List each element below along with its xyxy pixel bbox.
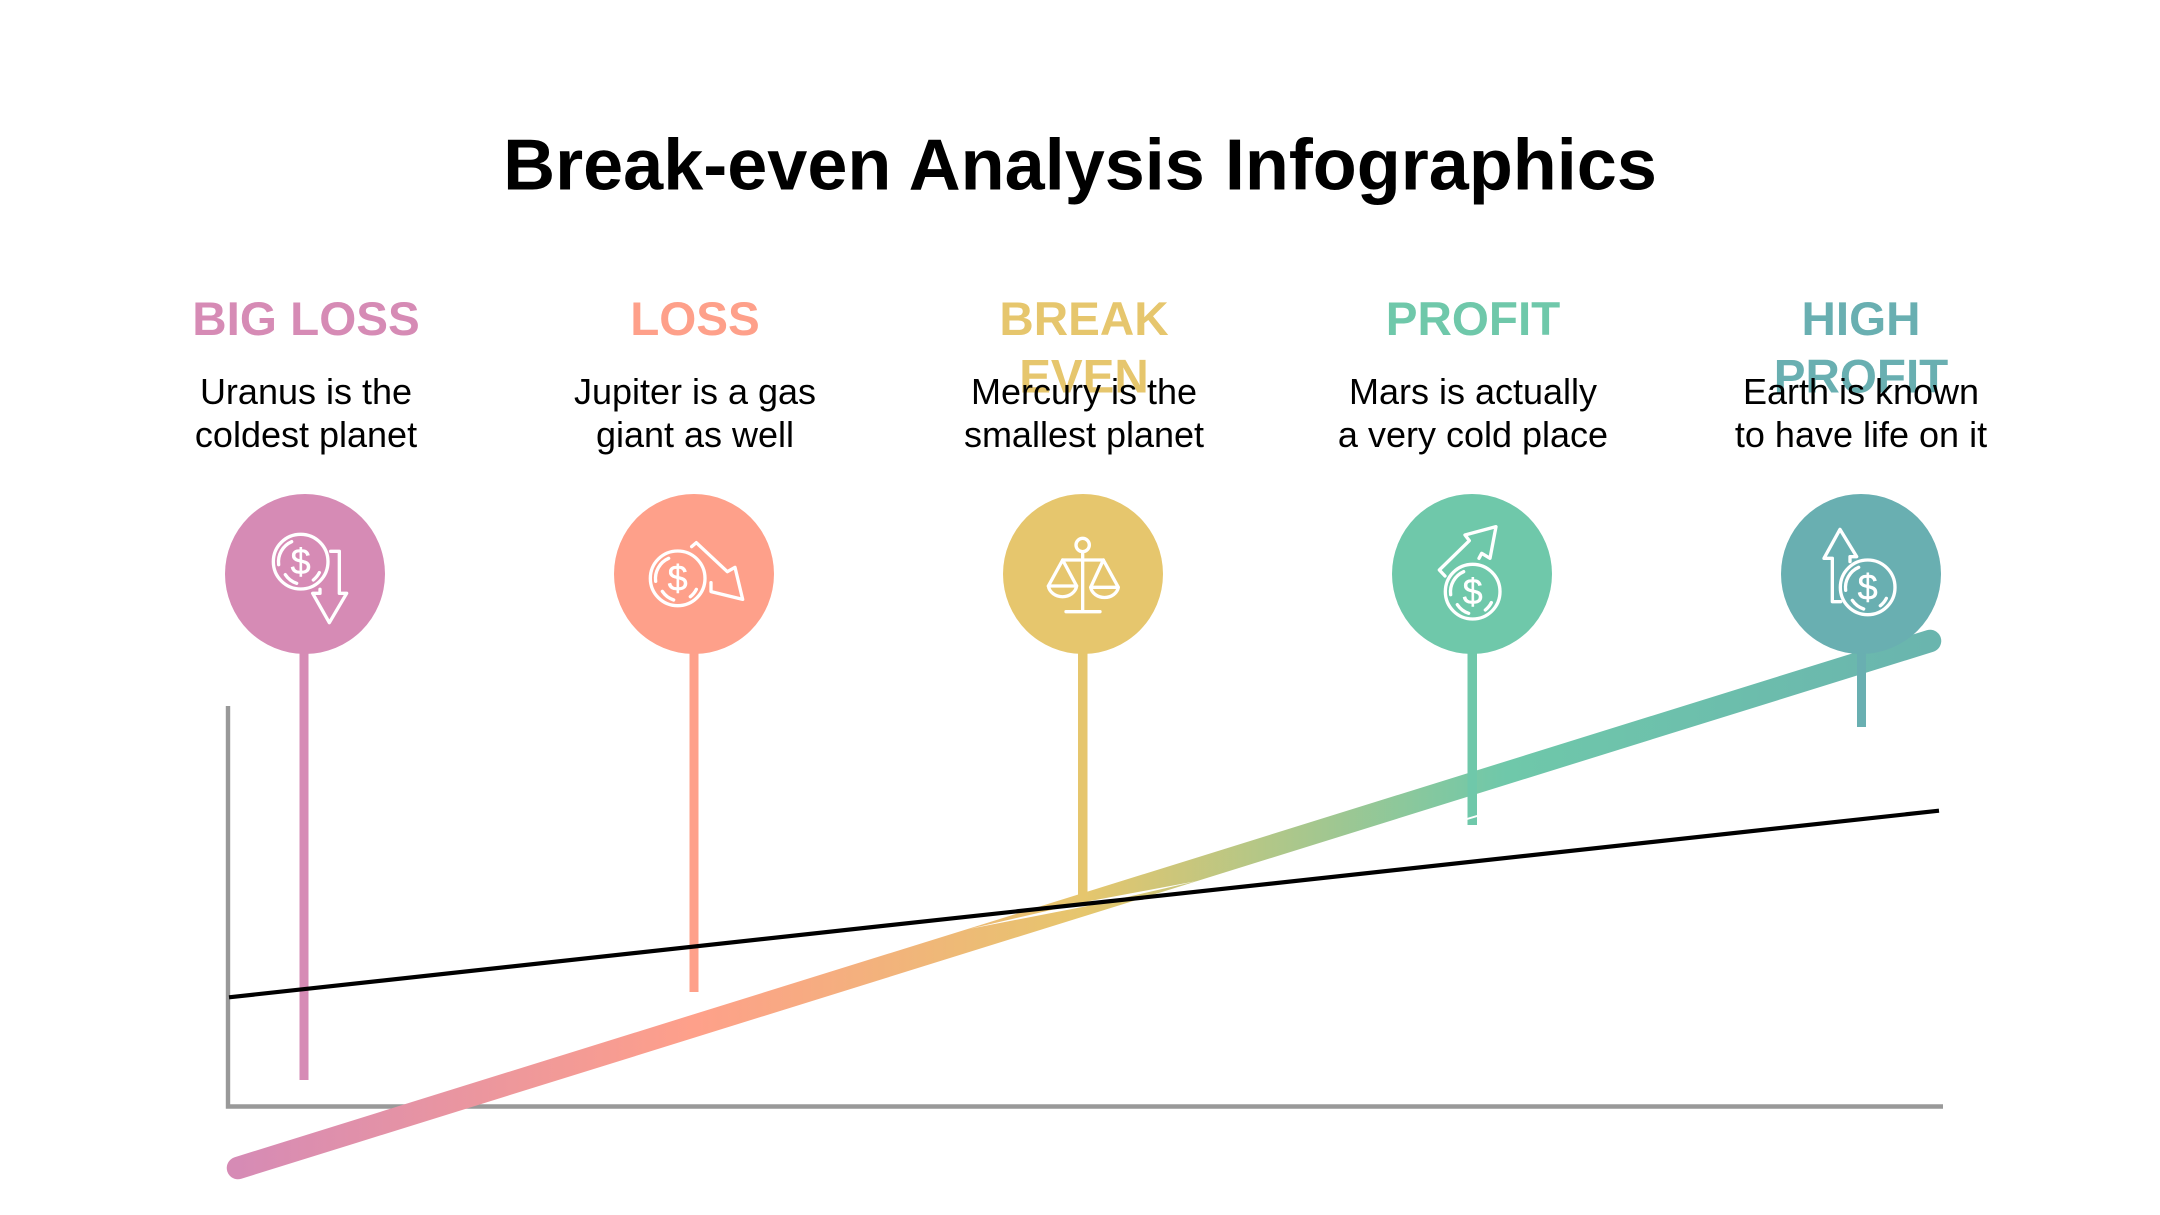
icon: coin with up arrow: $ [1858, 567, 1878, 608]
description: break even: smallest planet [964, 414, 1204, 455]
description: profit: Mars is actually [1349, 371, 1597, 412]
description: high profit: Earth is known [1743, 371, 1979, 412]
heading: profit: PROFIT [1386, 293, 1560, 346]
heading: break even: BREAK [999, 293, 1169, 346]
icon: coin with rising arrow: $ [1463, 571, 1483, 612]
stem: loss [690, 650, 698, 992]
stem: profit [1467, 650, 1477, 825]
circle: profit [1392, 494, 1552, 654]
description: big loss: coldest planet [195, 414, 417, 455]
description: big loss: Uranus is the [200, 371, 412, 412]
title: Break-even Analysis Infographics [503, 126, 1657, 206]
circle: high profit [1781, 494, 1941, 654]
heading: break even: EVEN [1019, 351, 1149, 404]
cost line [229, 811, 1939, 997]
heading: big loss: BIG LOSS [192, 293, 420, 346]
heading: high profit: PROFIT [1774, 351, 1948, 404]
circle: big loss [225, 494, 385, 654]
icon: balance scale [1048, 538, 1118, 612]
circle: loss [614, 494, 774, 654]
icon: coin with falling arrow: $ [668, 558, 688, 599]
column: break even [964, 293, 1204, 897]
stem: break even [1078, 650, 1088, 897]
icon: coin with rising arrow [1439, 527, 1500, 619]
icon: coin with down arrow [273, 534, 347, 623]
heading: high profit: HIGH [1802, 293, 1920, 346]
description: loss: giant as well [596, 414, 794, 455]
icon: coin with falling arrow [650, 543, 743, 606]
column: high profit [1735, 293, 1987, 727]
description: profit: a very cold place [1338, 414, 1608, 455]
icon: coin with up arrow [1824, 529, 1895, 615]
description: high profit: to have life on it [1735, 414, 1987, 455]
heading: loss: LOSS [630, 293, 760, 346]
revenue line with gradient [238, 641, 1930, 1168]
description: loss: Jupiter is a gas [574, 371, 816, 412]
column: loss [574, 293, 816, 992]
column: big loss [192, 293, 420, 1080]
stem: high profit [1857, 650, 1866, 727]
chart axes [228, 706, 1943, 1106]
circle: break even [1003, 494, 1163, 654]
stem: big loss [300, 650, 308, 1080]
column: profit [1338, 293, 1608, 825]
description: break even: Mercury is the [971, 371, 1197, 412]
icon: coin with down arrow: $ [291, 541, 311, 582]
